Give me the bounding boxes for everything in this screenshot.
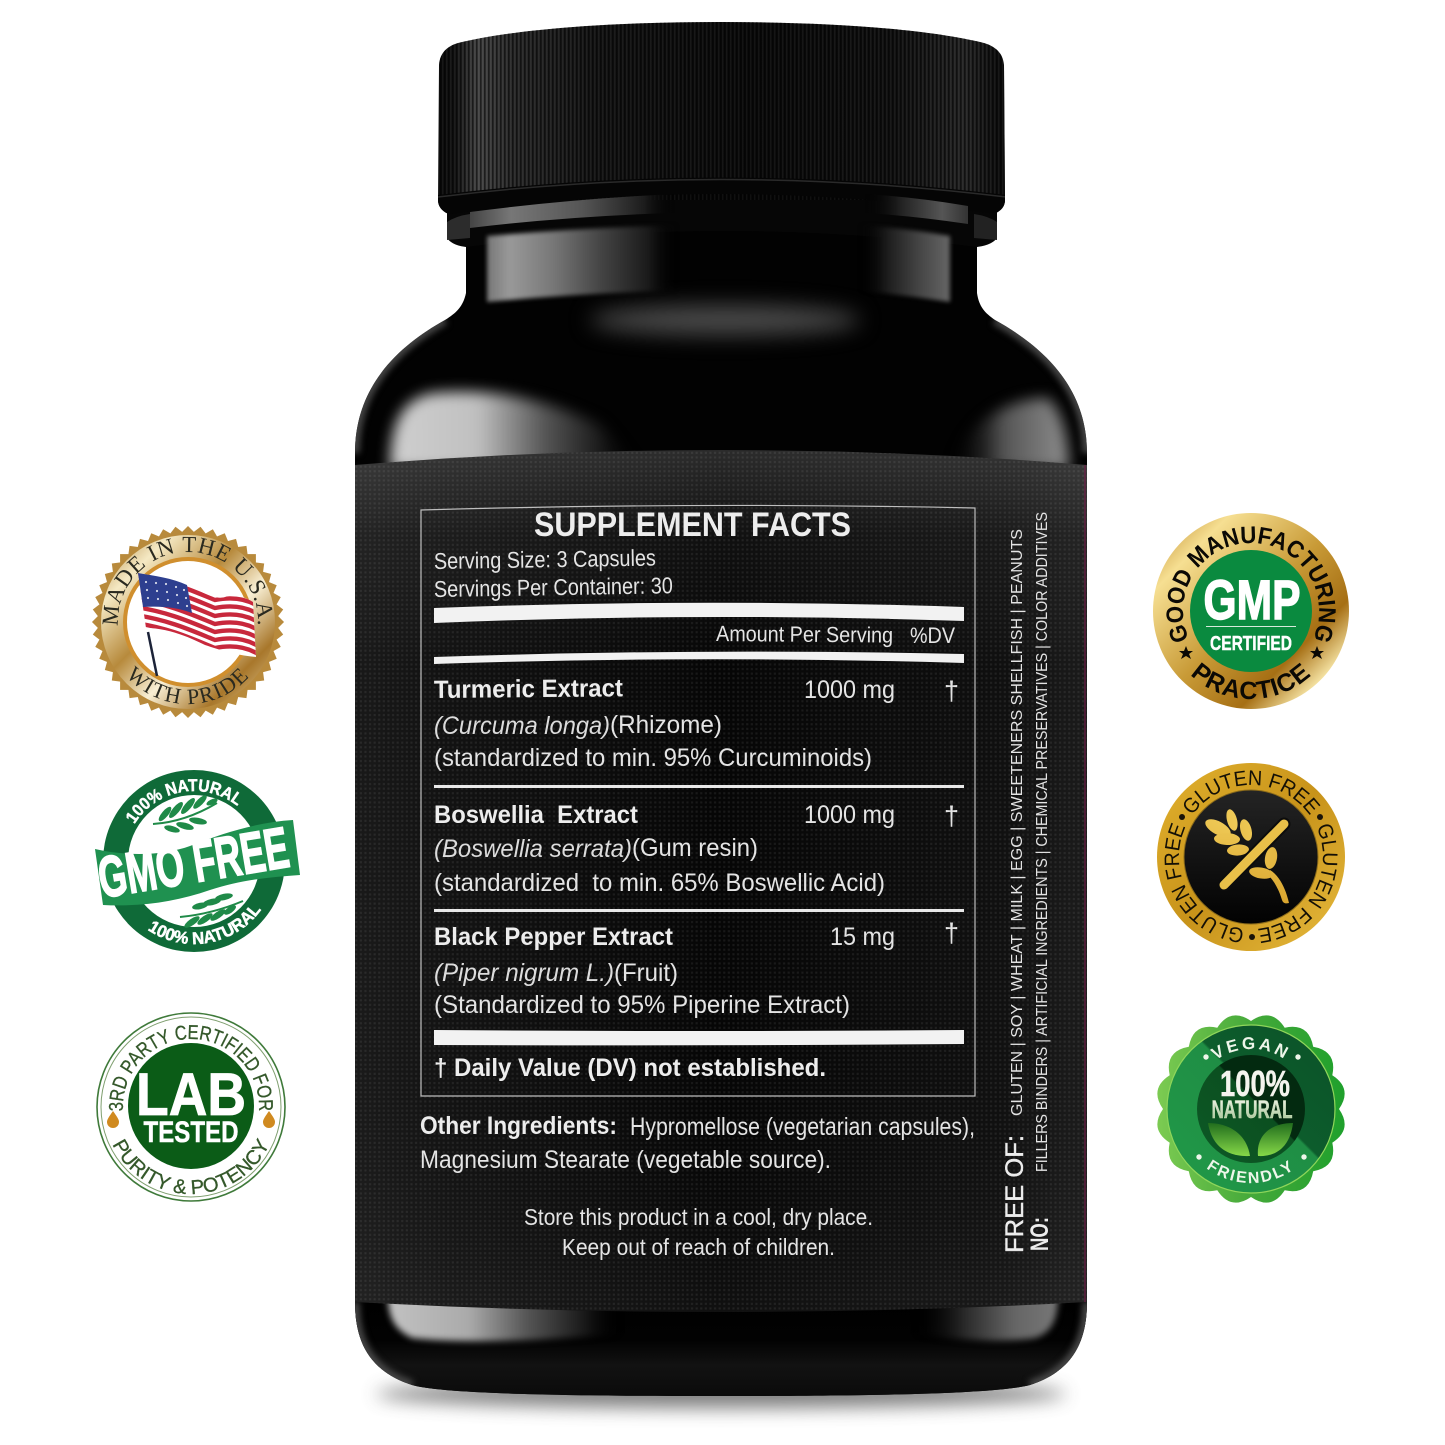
ingredient: black pepper: (Fruit)	[614, 959, 678, 987]
other ingredients: Magnesium Stearate (vegetable source).	[420, 1146, 831, 1174]
gmo arc text: 100% NATURAL	[148, 907, 262, 944]
lab arc text: 3RD PARTY CERTIFIED FOR	[108, 1025, 273, 1111]
gluten arc text: GLUTEN FREE	[1184, 770, 1320, 815]
icon: top sprig	[153, 793, 219, 834]
ingredient: black pepper: (Piper nigrum L.)	[434, 959, 614, 987]
servings per container: Servings Per Container: 30	[434, 572, 673, 602]
icon: bottom sprig	[180, 892, 243, 930]
thick rule 3	[434, 1030, 964, 1045]
heading: supplement facts: SUPPLEMENT FACTS	[534, 506, 851, 544]
ingredient: black pepper: †	[944, 918, 959, 948]
badge: gmo free	[93, 770, 300, 952]
vertical free-of text: NO:	[1026, 1217, 1054, 1251]
icon: drops	[107, 1111, 275, 1128]
gluten arc text: GLUTEN FREE	[1164, 822, 1242, 942]
other ingredients: Other Ingredients:	[420, 1112, 617, 1140]
bottle ground shadow	[376, 1380, 1066, 1408]
thick rule 1	[434, 603, 964, 623]
badge: made in the usa	[92, 526, 284, 718]
storage note: Store this product in a cool, dry place.	[524, 1204, 873, 1230]
ingredient: boswellia	[434, 801, 959, 897]
ingredient: black pepper: (Standardized to 95% Piperine Extract)	[434, 991, 850, 1019]
natural text: NATURAL	[1212, 1096, 1292, 1124]
badge: gmp certified: PRACTICE	[1191, 662, 1311, 700]
badge: lab tested	[96, 1012, 286, 1202]
badge: vegan natural: FRIENDLY	[1206, 1160, 1291, 1184]
ingredient: boswellia: (Boswellia serrata)	[434, 835, 632, 863]
100 percent text: 100%	[1220, 1063, 1290, 1104]
badge: vegan natural	[1157, 1015, 1345, 1203]
icon: crossed wheat	[1203, 808, 1289, 903]
usa badge text: MADE IN THE U.S.A.	[102, 536, 272, 626]
bottle cap	[438, 20, 1006, 216]
percent daily value header: %DV	[910, 623, 955, 648]
gmo free text: GMO FREE	[93, 815, 294, 911]
storage note	[524, 1204, 873, 1260]
ingredient: boswellia: Boswellia Extract	[434, 801, 639, 829]
ingredient: turmeric: 1000 mg	[804, 676, 895, 704]
icon: stars	[1179, 646, 1324, 659]
badge: lab tested: PURITY & POTENCY	[112, 1138, 268, 1194]
gmo arc text: 100% NATURAL	[126, 779, 240, 824]
icon: leaves	[1208, 1123, 1293, 1156]
ingredient: turmeric: Turmeric Extract	[434, 674, 624, 704]
daily value note: † Daily Value (DV) not established.	[434, 1054, 826, 1082]
badge: gluten free	[1157, 763, 1345, 951]
ring highlights	[470, 194, 968, 228]
thick rule 2	[434, 652, 964, 664]
gmo arc text	[126, 779, 262, 944]
ingredient: boswellia: 1000 mg	[804, 801, 895, 829]
gluten arc text	[1164, 770, 1338, 944]
certified text: CERTIFIED	[1210, 633, 1292, 655]
bottle body	[350, 200, 1095, 1400]
ingredient: black pepper: 15 mg	[830, 923, 895, 951]
badge: gmp certified	[1153, 513, 1349, 709]
ingredient: turmeric: †	[944, 676, 959, 706]
tested text: TESTED	[144, 1116, 238, 1149]
ingredient: turmeric: (standardized to min. 95% Curcuminoids)	[434, 744, 872, 772]
icon: american flag	[135, 573, 258, 676]
other ingredients: Hypromellose (vegetarian capsules),	[630, 1113, 975, 1141]
other ingredients	[420, 1112, 975, 1174]
vertical free-of text: FREE OF:	[1001, 1135, 1029, 1253]
gluten arc text: GLUTEN FREE	[1258, 824, 1338, 944]
ingredient: boswellia: (Gum resin)	[632, 834, 758, 862]
rule	[434, 785, 964, 788]
supplement facts panel	[421, 505, 975, 1096]
serving size: Serving Size: 3 Capsules	[434, 545, 656, 574]
ingredient: black pepper	[434, 918, 959, 1019]
vertical free-of text	[1001, 512, 1054, 1253]
ingredient: turmeric: (Rhizome)	[610, 711, 722, 739]
vegan arc text: VEGAN	[1210, 1037, 1288, 1058]
badge: made in the usa: WITH PRIDE	[130, 666, 248, 704]
ingredient: turmeric	[434, 674, 959, 772]
ingredient: boswellia: (standardized to min. 65% Boswellic Acid)	[434, 869, 885, 897]
ingredient: boswellia: †	[944, 801, 959, 831]
gmo ribbon	[95, 820, 300, 905]
vertical free-of text: GLUTEN | SOY | WHEAT | MILK | EGG | SWEETENERS SHELLFISH | PEANUTS	[1009, 529, 1026, 1116]
rule	[434, 909, 964, 912]
neck ring and neck highlights	[447, 190, 997, 302]
gmp text: GMP	[1204, 568, 1300, 631]
vertical free-of text: FILLERS BINDERS | ARTIFICIAL INGREDIENTS | CHEMICAL PRESERVATIVES | COLOR ADDITIVES	[1034, 512, 1051, 1172]
ingredient: turmeric: (Curcuma longa)	[434, 712, 610, 740]
gmp arc text: GOOD MANUFACTURING	[1166, 526, 1336, 642]
storage note: Keep out of reach of children.	[562, 1234, 835, 1260]
product label	[355, 450, 1087, 1312]
bottle	[350, 20, 1095, 1400]
lab text: LAB	[136, 1061, 246, 1128]
ingredient: black pepper: Black Pepper Extract	[434, 923, 674, 951]
amount per serving header: Amount Per Serving	[716, 621, 893, 648]
